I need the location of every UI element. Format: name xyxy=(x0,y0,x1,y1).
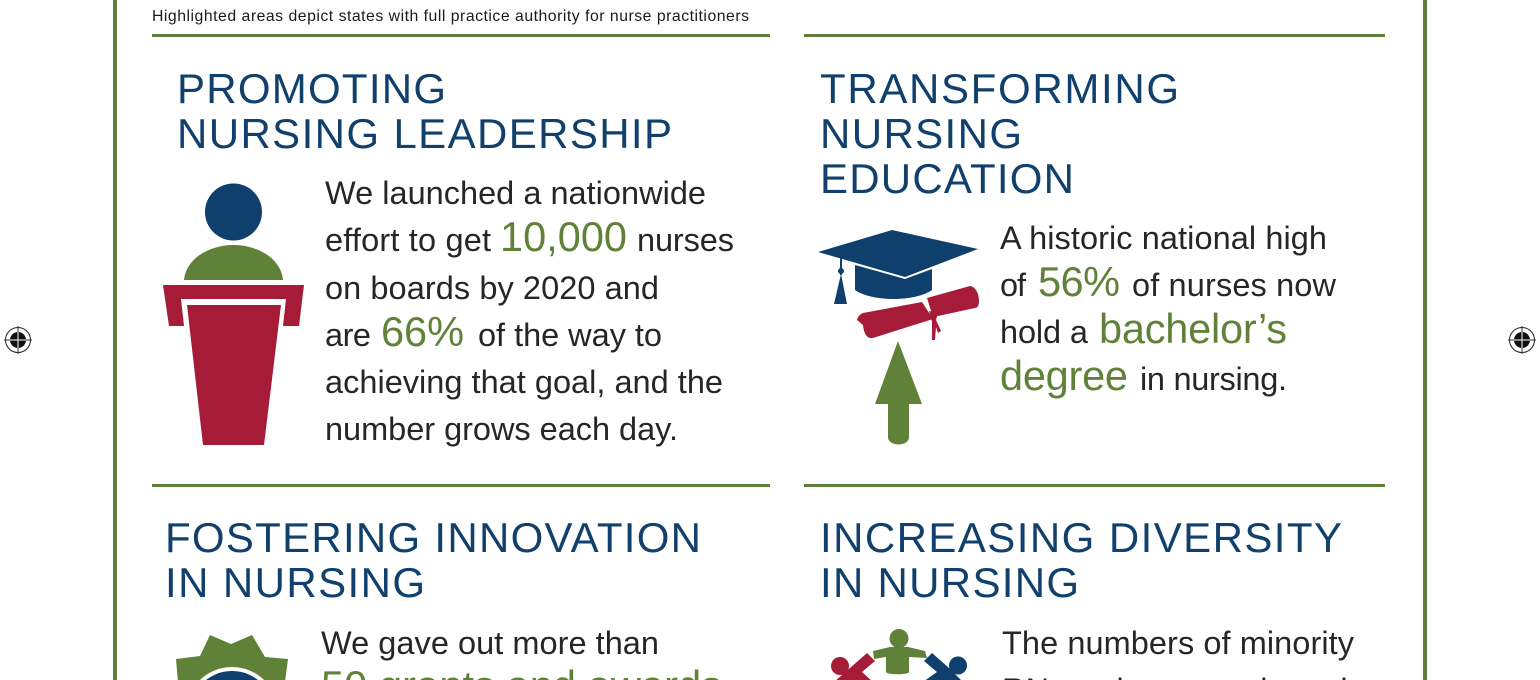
text: grants and awards: We gave out more than xyxy=(321,625,659,661)
text: bachelor's degree statistic: of nurses now xyxy=(1132,267,1337,303)
heading: fostering innovation: IN NURSING xyxy=(165,559,425,606)
text: nationwide board effort: 66% xyxy=(381,308,464,355)
text: nationwide board effort: achieving that goal, and the xyxy=(325,364,723,400)
text: bachelor's degree statistic: A historic national high xyxy=(1000,220,1327,256)
registration mark right xyxy=(1508,326,1536,354)
text: minority graduates: The numbers of minority xyxy=(1002,625,1355,661)
text: bachelor's degree statistic: bachelor’s xyxy=(1099,305,1287,352)
heading: transforming nursing education: EDUCATION xyxy=(820,155,1074,202)
heading: fostering innovation: FOSTERING INNOVATION xyxy=(165,514,701,561)
heading: increasing diversity: INCREASING DIVERSITY xyxy=(820,514,1342,561)
heading: transforming nursing education: NURSING xyxy=(820,110,1022,157)
panel: fostering innovation in nursing xyxy=(165,514,722,680)
text: nationwide board effort: nurses xyxy=(637,222,734,258)
heading: transforming nursing education xyxy=(820,65,1179,202)
text: bachelor's degree statistic xyxy=(1000,220,1337,399)
icon: graduation cap, diploma and arrow xyxy=(818,230,979,444)
heading: transforming nursing education: TRANSFORMING xyxy=(820,65,1179,112)
text: grants and awards xyxy=(321,625,722,680)
text: nationwide board effort: number grows each day. xyxy=(325,411,678,447)
icon: speaker at podium xyxy=(163,184,304,445)
text: nationwide board effort xyxy=(325,175,734,447)
icon: award badge xyxy=(176,635,288,680)
panel: promoting nursing leadership xyxy=(163,65,734,447)
icon: circle of people xyxy=(831,629,967,680)
text: bachelor's degree statistic: of xyxy=(1000,267,1027,303)
registration mark left xyxy=(4,326,32,354)
text: bachelor's degree statistic: in nursing. xyxy=(1140,361,1287,397)
text: nationwide board effort: 10,000 xyxy=(500,213,627,260)
text: bachelor's degree statistic: degree xyxy=(1000,352,1128,399)
heading: increasing diversity xyxy=(820,514,1342,606)
heading: increasing diversity: IN NURSING xyxy=(820,559,1079,606)
text: bachelor's degree statistic: 56% xyxy=(1038,258,1120,305)
text: nationwide board effort: of the way to xyxy=(478,317,662,353)
text: nationwide board effort: effort to get xyxy=(325,222,491,258)
heading: promoting nursing leadership xyxy=(177,65,672,157)
heading: promoting nursing leadership: PROMOTING xyxy=(177,65,446,112)
heading: promoting nursing leadership: NURSING LEADERSHIP xyxy=(177,110,672,157)
text: bachelor's degree statistic: hold a xyxy=(1000,314,1089,350)
text: nationwide board effort: on boards by 2020 and xyxy=(325,270,659,306)
heading: fostering innovation xyxy=(165,514,701,606)
panel: transforming nursing education xyxy=(818,65,1337,444)
text: minority graduates xyxy=(1002,625,1384,680)
panel: increasing diversity in nursing xyxy=(820,514,1384,680)
caption: full practice authority map note: Highlighted areas depict states with full practice authority for nurse practitioners xyxy=(152,8,749,25)
text: nationwide board effort: We launched a nationwide xyxy=(325,175,706,211)
text: nationwide board effort: are xyxy=(325,317,371,353)
